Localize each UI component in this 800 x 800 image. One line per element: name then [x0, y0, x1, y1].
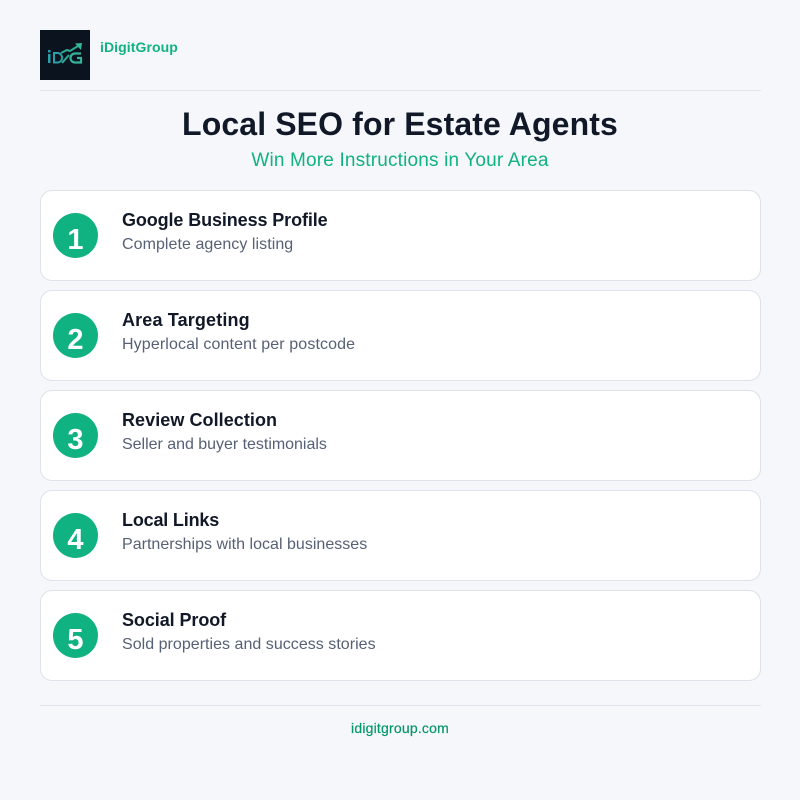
- card 1 description: Complete agency listing: [122, 236, 293, 253]
- footer website: idigitgroup.com: [351, 720, 449, 736]
- number badge 1: [53, 213, 98, 258]
- card 1 heading: Google Business Profile: [122, 210, 328, 230]
- card 5: Social Proof: [40, 590, 761, 681]
- number badge 5: [53, 613, 98, 658]
- card 4 heading: Local Links: [122, 510, 219, 530]
- card 4 description: Partnerships with local businesses: [122, 536, 367, 553]
- number badge 3: 3: [67, 424, 84, 456]
- number badge 2: [53, 313, 98, 358]
- card 5 description: Sold properties and success stories: [122, 636, 376, 653]
- icon: iDigitGroup logo: [40, 30, 90, 80]
- subtitle: Win More Instructions in Your Area: [251, 150, 549, 171]
- card 4: Local Links: [40, 490, 761, 581]
- number badge 5: 5: [67, 624, 84, 656]
- number badge 4: [53, 513, 98, 558]
- number badge 2: 2: [67, 324, 84, 356]
- card 2 heading: Area Targeting: [122, 310, 250, 330]
- card 1: Google Business Profile: [40, 190, 761, 281]
- number badge 1: 1: [67, 224, 84, 256]
- brand name: iDigitGroup: [100, 39, 178, 55]
- card 2: Area Targeting: [40, 290, 761, 381]
- card 5 heading: Social Proof: [122, 610, 226, 630]
- number badge 4: 4: [67, 524, 84, 556]
- card 3: Review Collection: [40, 390, 761, 481]
- number badge 3: [53, 413, 98, 458]
- card 2 description: Hyperlocal content per postcode: [122, 336, 355, 353]
- title: Local SEO for Estate Agents: [182, 106, 618, 142]
- card 3 description: Seller and buyer testimonials: [122, 436, 327, 453]
- card 3 heading: Review Collection: [122, 410, 277, 430]
